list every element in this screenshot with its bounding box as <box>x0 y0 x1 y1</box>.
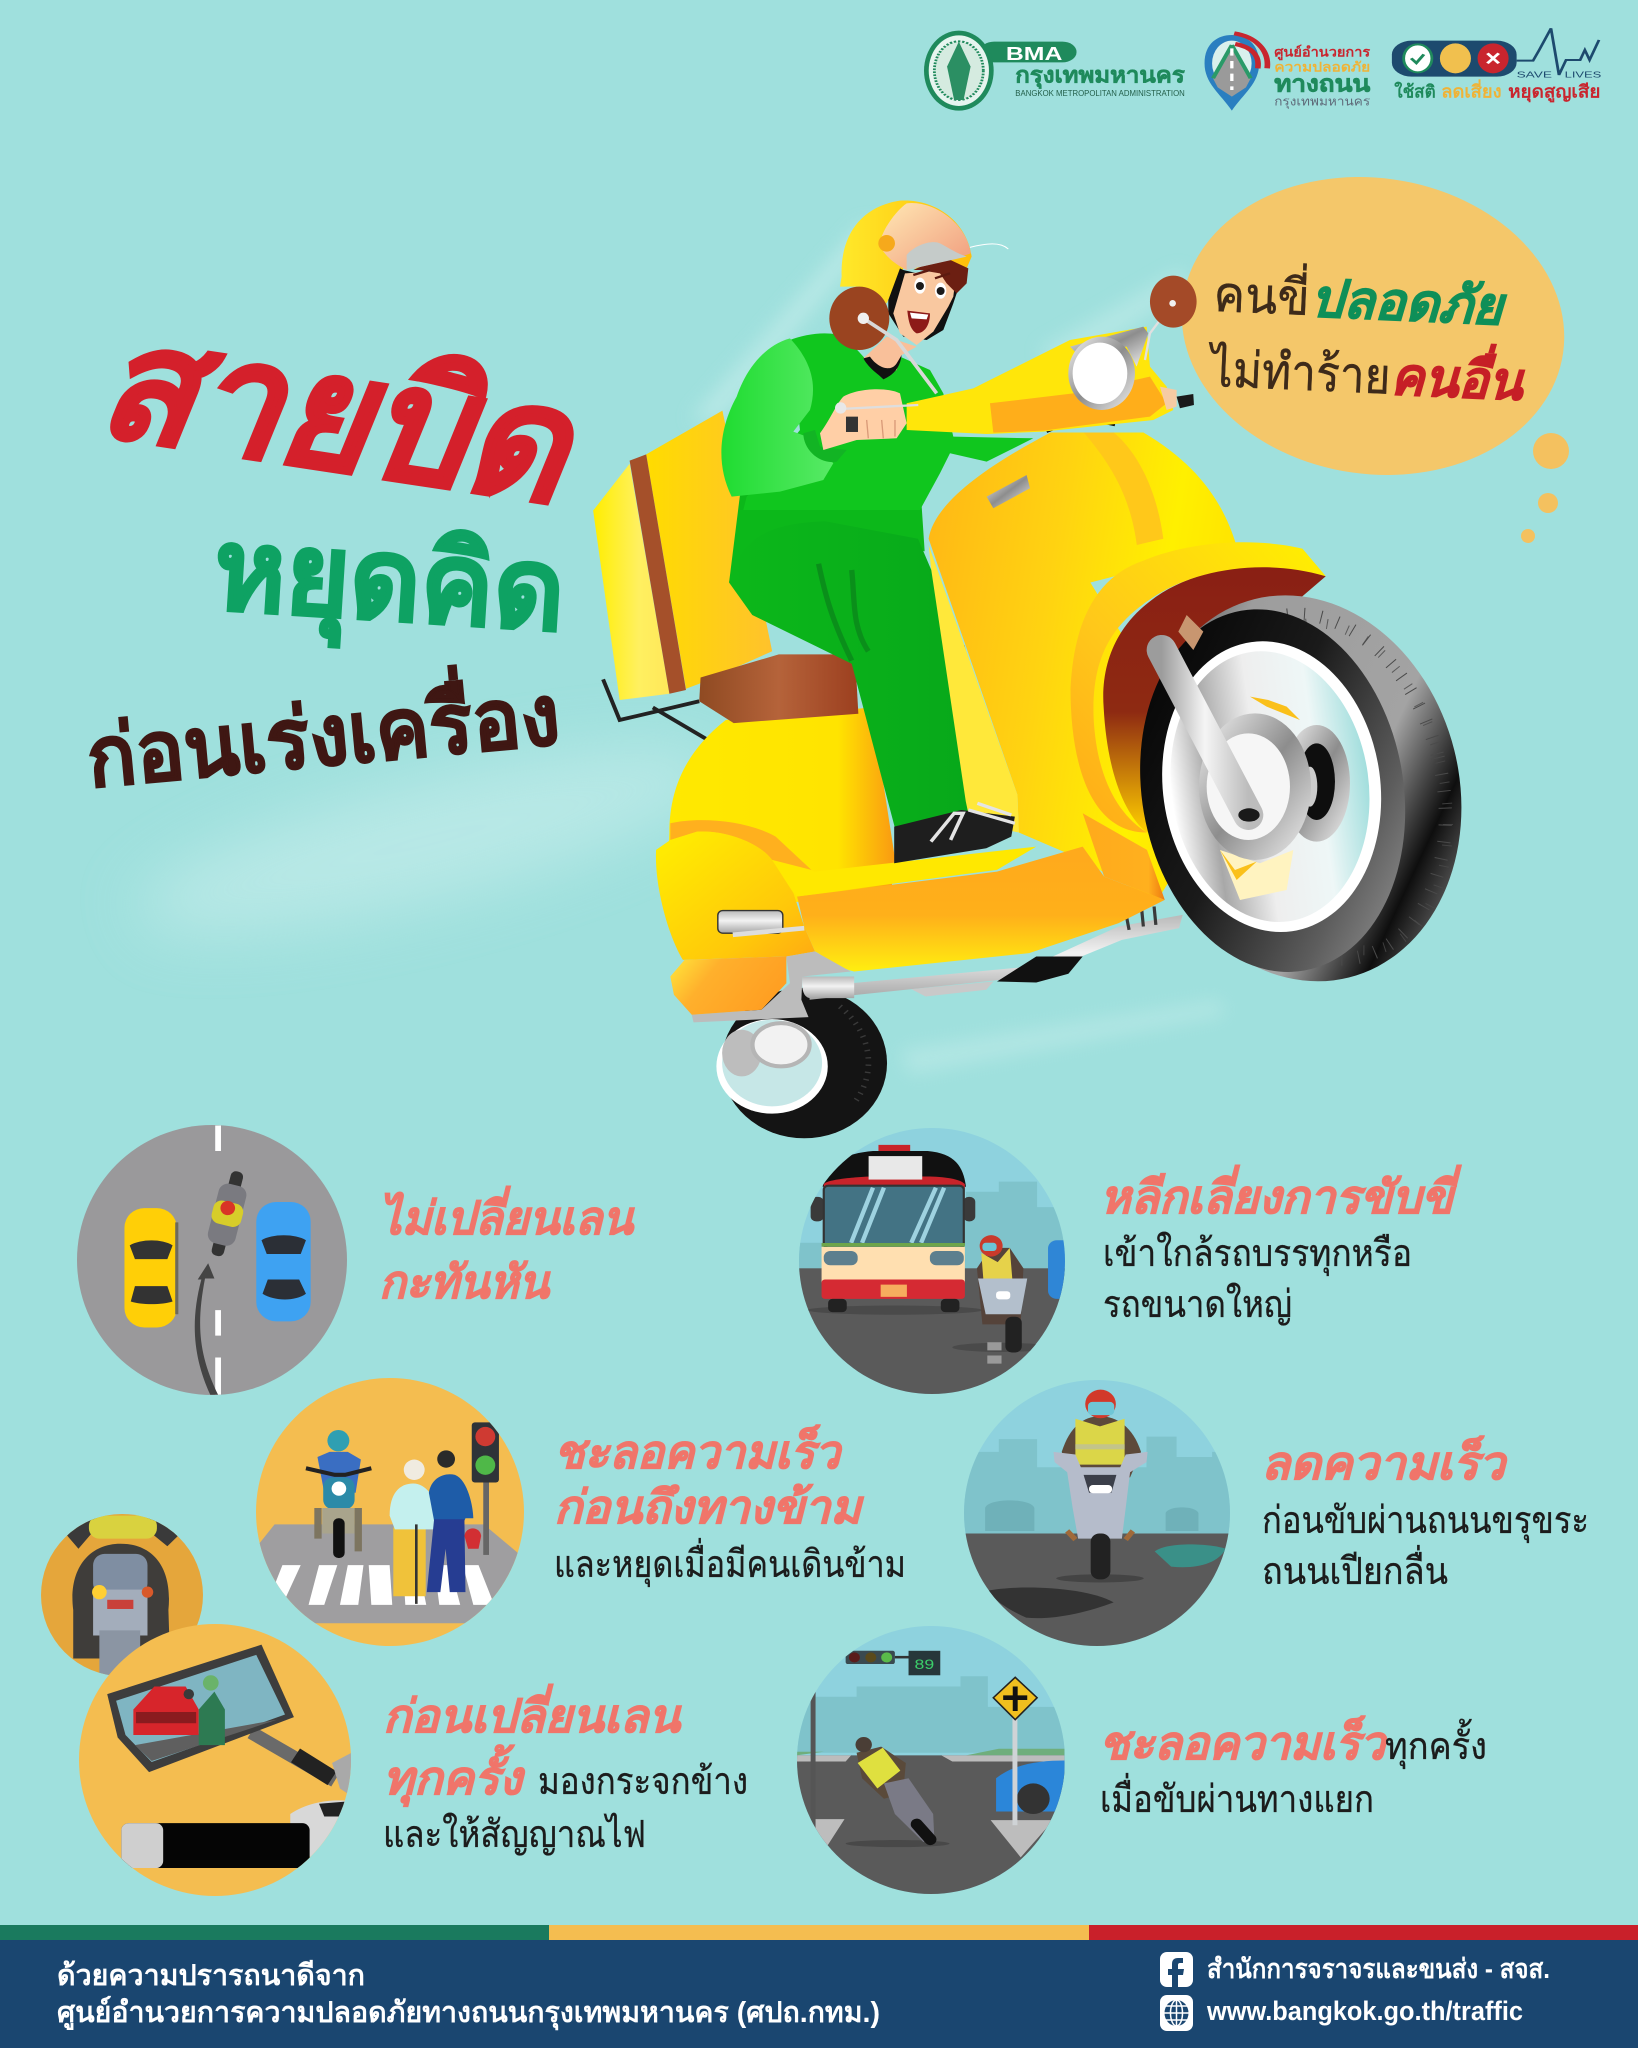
floor band <box>769 847 1036 897</box>
torso <box>743 333 1033 510</box>
tip 6: slow at intersections: เมื่อขับผ่านทางแยก <box>1100 1773 1374 1821</box>
tip 3: slow before crosswalk: ก่อนถึงทางข้าม <box>554 1481 865 1533</box>
front fender rim <box>1071 542 1326 832</box>
hair front <box>913 257 968 293</box>
waist filler <box>729 476 925 582</box>
speech bubble: ไม่ทำร้าย <box>1206 341 1392 405</box>
logo: BMA: กรุงเทพมหานคร <box>1015 63 1185 89</box>
old woman <box>393 1527 426 1596</box>
face <box>893 270 957 345</box>
tip 6: slow at intersections: ชะลอความเร็ว <box>1099 1715 1388 1769</box>
logo: BMA: BMA <box>1006 43 1062 64</box>
shield and floor <box>929 432 1236 901</box>
scooter and rider illustration <box>593 200 1501 1138</box>
footer bar <box>0 1940 1638 2048</box>
cuff <box>803 430 847 462</box>
shield top behind bar <box>1047 422 1115 432</box>
logo: save lives: ใช้สติ <box>1394 81 1436 101</box>
neck and collar <box>863 337 917 378</box>
tip 5: check mirrors and signal: ทุกครั้ง <box>383 1744 526 1807</box>
illustration: pedestrian crossing <box>250 1375 530 1655</box>
bubble dots <box>1521 433 1569 543</box>
illustration: intersection <box>790 1620 1070 1900</box>
tail panel <box>656 831 815 960</box>
mouth <box>907 311 930 333</box>
illustration: rear of motorcycle <box>41 1514 203 1675</box>
logo: road safety centre: ความปลอดภัย <box>1274 60 1370 75</box>
inner floor <box>929 545 1019 832</box>
trouser folds <box>819 564 868 661</box>
tip 1: no sudden lane change <box>70 1120 635 1400</box>
seat <box>699 654 858 723</box>
sleeve <box>721 338 833 497</box>
rider <box>1062 1416 1141 1477</box>
logo: save lives: หยุดสูญเสีย <box>1508 82 1600 103</box>
tip 5: check mirrors and signal: ก่อนเปลี่ยนเลน <box>383 1683 683 1742</box>
man <box>429 1474 473 1521</box>
exhaust tube <box>810 915 1183 1000</box>
bag <box>464 1528 481 1549</box>
logo: save lives: LIVES <box>1565 70 1601 80</box>
illustration: intersection: 89 <box>915 1658 934 1673</box>
lower scooter body <box>656 803 1183 1138</box>
tip 5: check mirrors and signal: มองกระจกข้าง <box>538 1761 748 1803</box>
grip <box>290 1800 345 1857</box>
tip 4: reduce speed on rough roads: ก่อนขับผ่านถนนขรุขระ <box>1262 1500 1589 1543</box>
tip 6: slow at intersections <box>790 1620 1487 1900</box>
delivery box <box>593 411 772 700</box>
speech bubble <box>1162 153 1584 543</box>
left mirror <box>829 287 937 393</box>
legs <box>729 521 968 828</box>
near-wheel shade <box>1083 813 1165 900</box>
right mirror <box>1145 276 1197 360</box>
speech bubble: ปลอดภัย <box>1309 270 1508 337</box>
traffic light <box>846 1651 895 1664</box>
shield crease <box>1084 432 1163 545</box>
silver bracket <box>692 951 851 1022</box>
sign <box>1012 1717 1017 1825</box>
logo: BMA: BANGKOK METROPOLITAN ADMINISTRATION <box>1015 89 1185 98</box>
traffic light <box>483 1482 489 1555</box>
rider <box>952 1342 1036 1352</box>
belly <box>797 847 1165 971</box>
title: สายบิด <box>90 290 587 538</box>
road marks <box>987 1342 1002 1364</box>
footer credit: ด้วยความปรารถนาดีจาก <box>57 1960 365 1992</box>
title: ก่อนเร่งเครื่อง <box>82 656 564 805</box>
shoe <box>894 803 1015 863</box>
black undertray <box>997 956 1083 982</box>
helmet <box>840 200 972 303</box>
tip 1: no sudden lane change: กะทันหัน <box>379 1256 551 1308</box>
logo: save lives: ลดเสี่ยง <box>1441 79 1502 101</box>
tip 2: avoid riding near large vehicles: หลีกเลี่ยงการขับขี่ <box>1100 1164 1462 1223</box>
icon: globe <box>1160 1995 1193 2031</box>
speech bubble: คนขี่ <box>1213 260 1311 326</box>
tail lamp <box>718 911 804 935</box>
footer credit <box>57 1960 880 2030</box>
logo: road safety centre <box>1205 33 1371 111</box>
icon: facebook <box>1160 1952 1193 1987</box>
hand <box>820 389 918 450</box>
rear seat end <box>935 642 974 684</box>
logo: BMA <box>924 31 1185 111</box>
footer credit: ศูนย์อำนวยการความปลอดภัยทางถนนกรุงเทพมหานคร (ศปถ.กทม.) <box>57 1995 880 2030</box>
front fender inner <box>1103 565 1326 832</box>
rack <box>603 679 706 739</box>
motorcycle <box>208 1171 246 1256</box>
logo: save lives: SAVE <box>1517 70 1552 80</box>
colour stripe <box>0 1925 1638 1940</box>
silver plate <box>911 981 993 996</box>
front wheel <box>1140 595 1462 982</box>
tip 5: check mirrors and signal: และให้สัญญาณไฟ <box>383 1813 646 1856</box>
tip 2: avoid riding near large vehicles <box>790 1120 1462 1401</box>
blue car <box>256 1202 311 1321</box>
tip 3: slow before crosswalk <box>250 1375 906 1655</box>
tip 2: avoid riding near large vehicles: เข้าใกล้รถบรรทุกหรือ <box>1103 1232 1412 1276</box>
tip 1: no sudden lane change: ไม่เปลี่ยนเลน <box>379 1185 635 1244</box>
exhaust end <box>802 976 854 998</box>
tip 4: reduce speed on rough roads <box>960 1375 1589 1651</box>
logos row <box>924 28 1601 111</box>
illustration: overhead road <box>77 1125 347 1395</box>
motorcyclist <box>317 1452 361 1493</box>
tail panel orange arc <box>670 820 811 870</box>
tip 4: reduce speed on rough roads: ถนนเปียกลื่น <box>1262 1545 1448 1593</box>
tip 5: check mirrors and signal <box>38 1510 748 1905</box>
yellow car <box>124 1208 177 1327</box>
tip 6: slow at intersections: ทุกครั้ง <box>1385 1718 1487 1769</box>
illustration: bus and rider <box>799 1128 1065 1394</box>
blue car <box>1048 1240 1065 1299</box>
tip 4: reduce speed on rough roads: ลดความเร็ว <box>1261 1435 1508 1489</box>
bus <box>878 1144 910 1151</box>
logo: save lives <box>1392 28 1601 103</box>
upper rear body <box>666 708 895 920</box>
title <box>82 290 587 805</box>
rider <box>846 1840 950 1847</box>
rear skirt <box>670 956 786 1015</box>
rider upper body <box>721 200 1197 510</box>
rear wheel <box>716 988 887 1138</box>
illustration: rider and pothole <box>960 1375 1235 1651</box>
speech bubble: คนอื่น <box>1389 339 1527 412</box>
illustration: mirror and grip <box>75 1620 360 1905</box>
title: หยุดคิด <box>210 506 569 662</box>
logo: road safety centre: ทางถนน <box>1274 71 1371 97</box>
hair back <box>888 268 960 340</box>
background speed glow <box>124 225 1225 1075</box>
motorcycle <box>1054 1452 1148 1539</box>
back of scooter <box>593 411 1326 920</box>
tip 3: slow before crosswalk: และหยุดเมื่อมีคนเดินข้าม <box>554 1538 906 1587</box>
shield badge <box>987 475 1030 508</box>
logo: road safety centre: ศูนย์อำนวยการ <box>1274 44 1370 62</box>
tread marks <box>1286 608 1453 966</box>
handlebar <box>907 327 1194 434</box>
headlight <box>1068 327 1148 410</box>
footer bar: สำนักการจราจรและขนส่ง - สจส. <box>1207 1954 1550 1984</box>
logo: road safety centre: กรุงเทพมหานคร <box>1274 95 1370 109</box>
blue car <box>996 1760 1064 1811</box>
tip 3: slow before crosswalk: ชะลอความเร็ว <box>554 1424 843 1478</box>
eyes <box>914 278 926 294</box>
tip 2: avoid riding near large vehicles: รถขนาดใหญ่ <box>1103 1283 1292 1326</box>
visor <box>880 203 971 270</box>
footer bar: www.bangkok.go.th/traffic <box>1206 1996 1523 2026</box>
